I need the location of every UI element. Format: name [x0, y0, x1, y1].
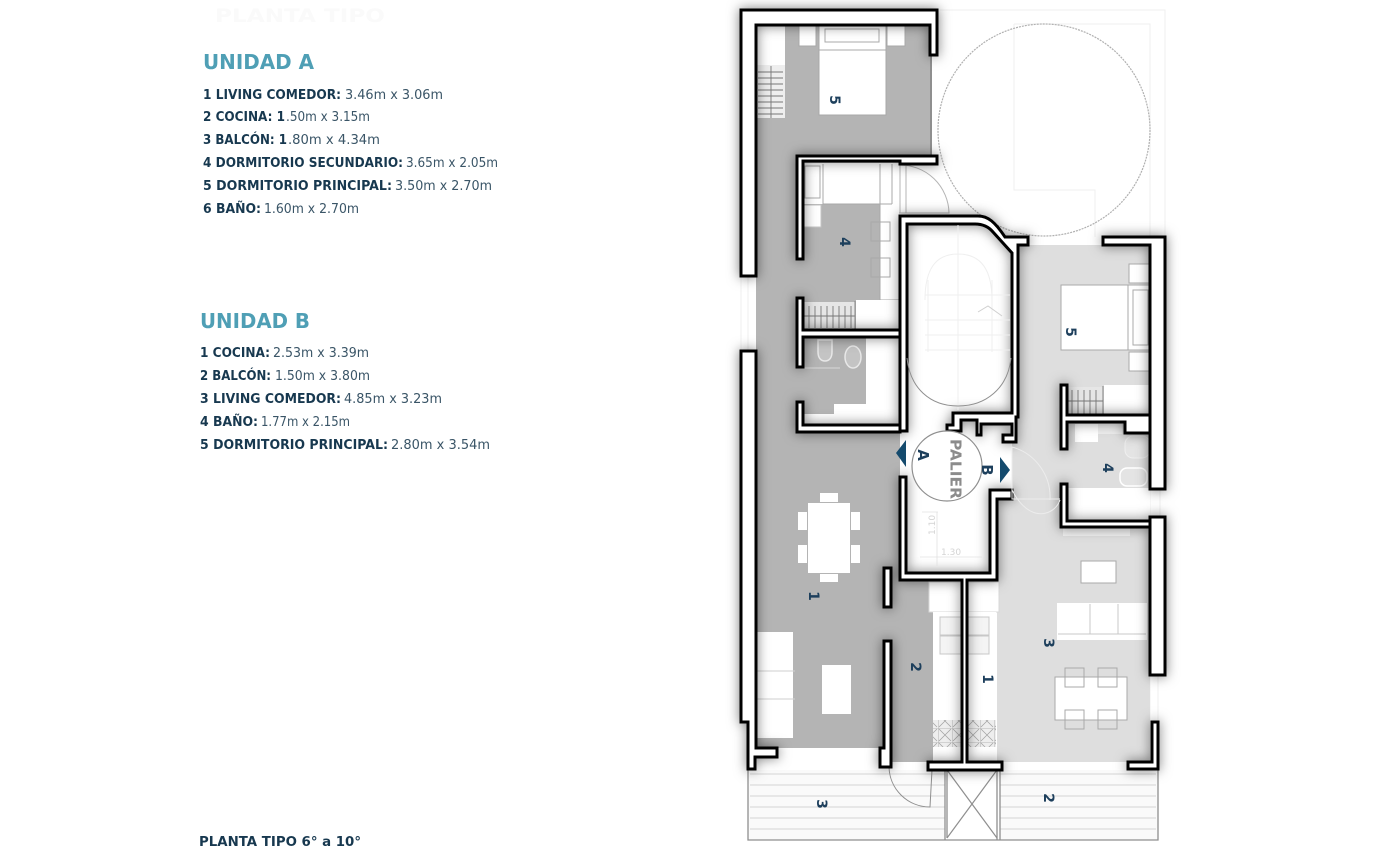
- arrow A: [896, 440, 906, 467]
- row: balcon: 2 BALCÓN:: [200, 368, 271, 384]
- row: balcon: .80m x 4.34m: [288, 133, 380, 148]
- furniture: bedroom B: [1061, 264, 1150, 415]
- palier label: PALIER: [946, 439, 964, 499]
- number 5 unit B: 5: [1062, 327, 1078, 337]
- wall: bedroom partition: [797, 156, 937, 259]
- wall: balcony post: [880, 641, 891, 767]
- ghost heading: PLANTA TIPO: [215, 5, 385, 27]
- row: balcon: [203, 132, 380, 148]
- wall: closet and bath B: [1061, 385, 1150, 449]
- number 4 unit B: 4: [1099, 463, 1115, 473]
- furniture: bath B: [1067, 424, 1150, 521]
- row: dormitorio principal: 2.80m x 3.54m: [391, 438, 490, 453]
- row: living comedor: 3.46m x 3.06m: [345, 88, 443, 103]
- number 1 unit B: 1: [979, 674, 995, 684]
- row: bano: 4 BAÑO:: [200, 414, 258, 430]
- wall: closet and bath A: [797, 298, 900, 367]
- number 2 unit A: 2: [907, 662, 923, 672]
- row: cocina: 1 COCINA:: [200, 346, 270, 361]
- heading: unidad A: UNIDAD A: [203, 50, 315, 74]
- row: living comedor: 4.85m x 3.23m: [344, 392, 442, 407]
- number 5 unit A: 5: [826, 95, 842, 105]
- furniture: bath A: [803, 337, 900, 425]
- wall: bedroom B right: [1103, 237, 1165, 489]
- balconies: [748, 770, 1158, 840]
- row: balcon: 1.50m x 3.80m: [275, 369, 370, 384]
- furniture: living A: [757, 632, 851, 738]
- row: bano: [200, 414, 350, 430]
- wall: left lower: [741, 351, 777, 769]
- row: bano: 6 BAÑO:: [203, 201, 261, 217]
- panel: unidad A room list: [203, 50, 498, 217]
- wall: bath B lower: [1061, 484, 1150, 527]
- row: balcon: 3 BALCÓN: 1: [203, 132, 287, 148]
- heading: unidad B: UNIDAD B: [200, 309, 310, 333]
- row: dormitorio principal: [200, 438, 490, 453]
- wall: stair core: [900, 216, 1028, 442]
- wall: right lower: [1150, 517, 1165, 675]
- floor plan: [741, 10, 1165, 840]
- row: dormitorio secundario: 3.65m x 2.05m: [406, 156, 498, 171]
- row: balcon: [200, 368, 370, 384]
- row: dormitorio principal: 3.50m x 2.70m: [395, 179, 492, 194]
- row: living comedor: 1 LIVING COMEDOR:: [203, 88, 341, 103]
- wall: window post: [884, 568, 891, 607]
- caption: planta tipo: PLANTA TIPO 6° a 10°: [199, 835, 361, 850]
- row: living comedor: [200, 392, 442, 407]
- wall: corner right: [1128, 722, 1158, 769]
- furniture: main bedroom A: [757, 25, 931, 156]
- row: cocina: .50m x 3.15m: [286, 110, 370, 125]
- row: dormitorio principal: 5 DORMITORIO PRINCIPAL:: [203, 179, 392, 194]
- furniture: bedroom 4 A: [803, 163, 900, 330]
- arrow B: [1000, 457, 1010, 483]
- elevator dimensions: 1.30: [941, 548, 961, 558]
- row: living comedor: [203, 88, 443, 103]
- panel: unidad B room list: [200, 309, 490, 453]
- walls: [741, 10, 1165, 770]
- row: cocina: 2.53m x 3.39m: [273, 346, 369, 361]
- entry A label: A: [914, 449, 932, 461]
- furniture: living B: [1055, 528, 1147, 729]
- furniture: kitchens: [929, 582, 999, 762]
- stairs: [907, 225, 1011, 410]
- row: cocina: 2 COCINA: 1: [203, 110, 285, 125]
- row: dormitorio secundario: 4 DORMITORIO SECUNDARIO:: [203, 156, 403, 171]
- door swing B: [1012, 447, 1060, 514]
- palier circle: [912, 431, 982, 501]
- balcony door: [889, 767, 932, 807]
- row: living comedor: 3 LIVING COMEDOR:: [200, 392, 341, 407]
- number 2 unit B: 2: [1040, 793, 1056, 803]
- bedroom door: [899, 165, 949, 213]
- number 3 unit A: 3: [813, 799, 829, 809]
- elevator dimensions: 1.10: [928, 515, 938, 535]
- wall: top left: [741, 10, 937, 276]
- room numbers: [805, 95, 1115, 809]
- number 1 unit A: 1: [805, 591, 821, 601]
- floor: unit B: [997, 245, 1150, 762]
- wall: lower core: [900, 477, 1012, 770]
- number 4 unit A: 4: [836, 237, 852, 247]
- row: cocina: [203, 110, 370, 125]
- floor: unit A: [756, 25, 933, 762]
- wall: bath A lower: [797, 402, 900, 432]
- elevator dimensions: [920, 512, 982, 566]
- furniture: dining A: [798, 493, 860, 582]
- row: cocina: [200, 346, 369, 361]
- entry B label: B: [978, 464, 996, 476]
- patio outline: [741, 10, 1165, 722]
- row: bano: [203, 201, 359, 217]
- row: dormitorio principal: [203, 179, 492, 194]
- number 3 unit B: 3: [1040, 638, 1056, 648]
- row: bano: 1.60m x 2.70m: [264, 202, 359, 217]
- row: bano: 1.77m x 2.15m: [261, 415, 350, 430]
- row: dormitorio principal: 5 DORMITORIO PRINCIPAL:: [200, 438, 388, 453]
